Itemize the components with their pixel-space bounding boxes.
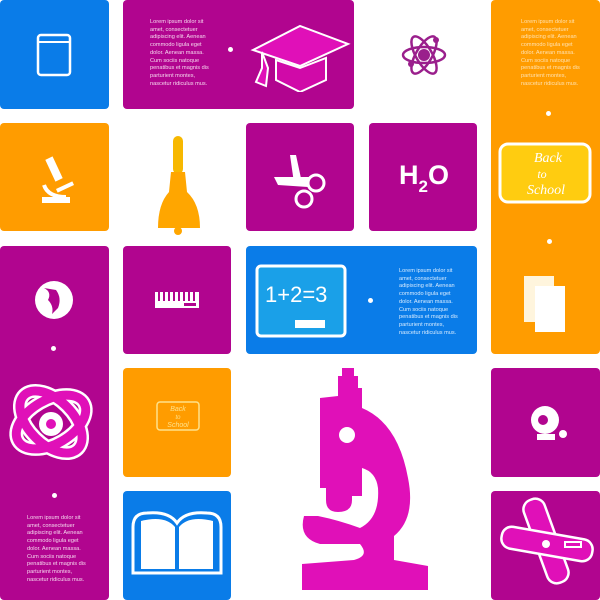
tile: back to school orange: School xyxy=(167,422,189,429)
icon: atom xyxy=(402,35,446,75)
tile: back to school orange: to xyxy=(175,415,181,421)
text block: Lorem ipsum dolor sit amet, consectetuer adipiscing elit. Aenean commodo ligula eget dolor. Aenean massa. Cum sociis natoque penatibus et magnis dis parturient montes, nascetur ridiculus mus. xyxy=(521,19,580,87)
tile: ruler xyxy=(123,246,231,354)
tile: bell magenta xyxy=(491,368,600,477)
icon: books xyxy=(524,276,565,332)
icon: globe xyxy=(35,281,73,319)
icon: back to school sign xyxy=(498,142,592,204)
text block: Lorem ipsum dolor sit amet, consectetuer adipiscing elit. Aenean commodo ligula eget dolor. Aenean massa. Cum sociis natoque penatibus et magnis dis parturient montes, nascetur ridiculus mus. xyxy=(27,515,86,583)
panel: blackboard blue xyxy=(246,246,477,354)
icon: bell xyxy=(158,136,200,235)
tile: microscope orange xyxy=(0,123,109,231)
icon: graduation cap xyxy=(250,24,350,92)
icon: back to school sign: Back xyxy=(534,151,563,166)
tile: H2O xyxy=(369,123,477,231)
tile: plaster magenta xyxy=(491,491,600,600)
text block: Lorem ipsum dolor sit amet, consectetuer adipiscing elit. Aenean commodo ligula eget dolor. Aenean massa. Cum sociis natoque penatibus et magnis dis parturient montes, nascetur ridiculus mus. xyxy=(150,19,209,87)
tile: back to school orange: Back xyxy=(170,406,186,413)
panel: orange tall right xyxy=(491,0,600,354)
tile: back to school orange xyxy=(123,368,231,477)
icon: atom large xyxy=(9,384,93,460)
text block: Lorem ipsum dolor sit amet, consectetuer adipiscing elit. Aenean commodo ligula eget dolor. Aenean massa. Cum sociis natoque penatibus et magnis dis parturient montes, nascetur ridiculus mus. xyxy=(399,268,458,336)
icon: big microscope xyxy=(302,368,428,590)
tile: open book blue xyxy=(123,491,231,600)
panel: graduation text xyxy=(123,0,354,109)
icon: back to school sign: to xyxy=(537,167,547,181)
tile: H2O: H2O xyxy=(399,160,449,196)
tile: book blue xyxy=(0,0,109,109)
panel: magenta left tall xyxy=(0,246,109,600)
icon: blackboard: 1+2=3 xyxy=(265,282,327,307)
icon: blackboard xyxy=(256,264,346,338)
tile: scissors xyxy=(246,123,354,231)
icon: back to school sign: School xyxy=(527,183,565,198)
